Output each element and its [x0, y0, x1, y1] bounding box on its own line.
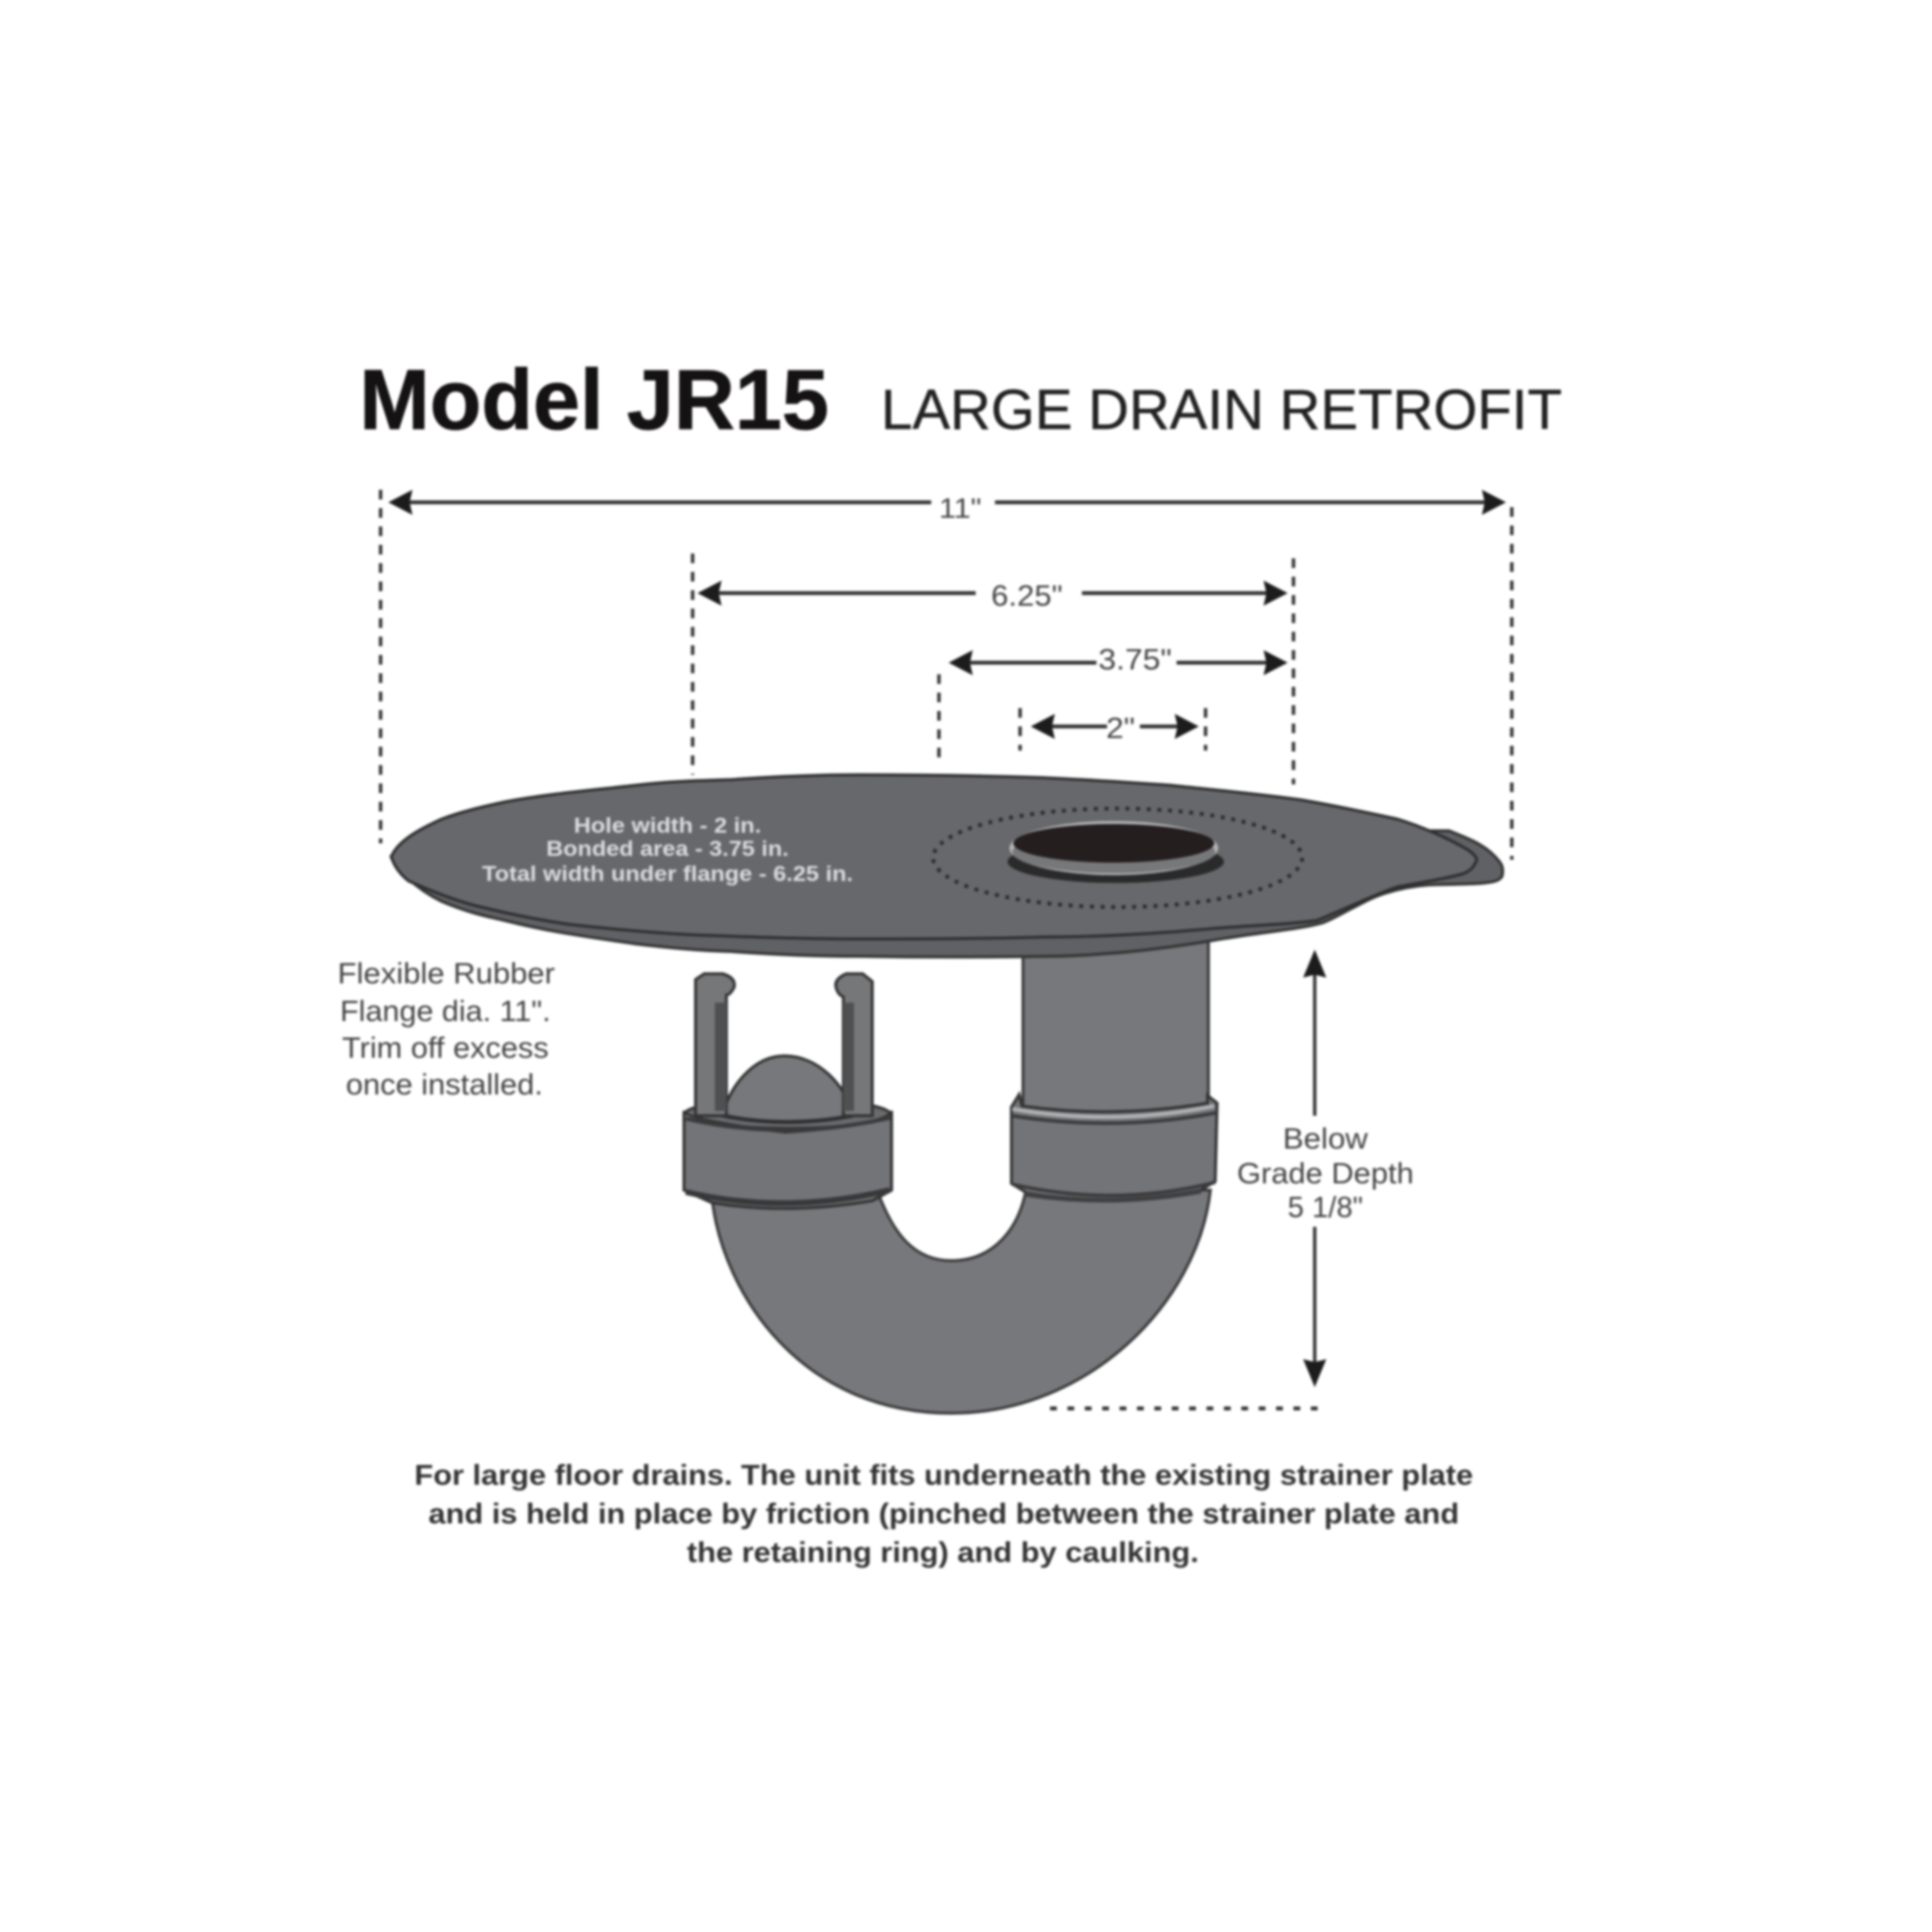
- flange text: Total width under flange - 6.25 in.: [482, 862, 853, 886]
- dotted ground line: [1050, 1406, 1321, 1410]
- description text: the retaining ring) and by caulking.: [687, 1537, 1199, 1569]
- rubber flange: [391, 775, 1503, 957]
- below grade depth label: 5 1/8": [1288, 1190, 1363, 1224]
- description text: [414, 1460, 1473, 1569]
- flexible rubber flange note: Flange dia. 11".: [340, 994, 551, 1028]
- description text: For large floor drains. The unit fits underneath the existing strainer plate: [414, 1460, 1473, 1492]
- flange top surface: [391, 775, 1477, 939]
- below grade depth label: Below: [1283, 1122, 1369, 1155]
- right vertical pipe: [1023, 932, 1208, 1121]
- flexible rubber flange note: Trim off excess: [342, 1031, 549, 1065]
- title: Model JR15: [359, 352, 829, 447]
- dimension arrow: 6.25 inch: 6.25": [991, 579, 1063, 612]
- title: [359, 352, 1562, 447]
- right prong: [836, 974, 872, 1116]
- U-bend: [712, 1190, 1210, 1413]
- dotted bonded area ring: [933, 809, 1302, 907]
- flexible rubber flange note: [338, 956, 554, 1101]
- dashed extension lines: [381, 490, 1512, 860]
- dimension arrow: 3.75 inch: 3.75": [1098, 642, 1172, 676]
- left prong: [696, 974, 734, 1116]
- drain hole: [1008, 821, 1224, 883]
- flexible rubber flange note: Flexible Rubber: [338, 956, 554, 990]
- flange text: Bonded area - 3.75 in.: [547, 837, 788, 861]
- flange underside lip: [391, 831, 1503, 957]
- P-trap drain: [684, 932, 1217, 1413]
- subtitle: LARGE DRAIN RETROFIT: [881, 379, 1562, 441]
- dimension arrow: 2 inch: [1031, 711, 1199, 745]
- left collar: [684, 1111, 892, 1208]
- right collar: [1011, 1094, 1217, 1200]
- flexible rubber flange note: once installed.: [346, 1067, 543, 1101]
- description text: and is held in place by friction (pinched between the strainer plate and: [429, 1498, 1459, 1530]
- flange text: [482, 813, 853, 886]
- dimension arrow: 3.75 inch: [949, 642, 1288, 676]
- left collar back rim: [685, 1099, 890, 1128]
- below grade depth arrow: [1303, 950, 1326, 1387]
- flange text: Hole width - 2 in.: [574, 813, 761, 838]
- below grade depth label: [1236, 1122, 1414, 1224]
- dimension arrow: 6.25 inch: [697, 579, 1288, 612]
- below grade depth label: Grade Depth: [1236, 1156, 1414, 1190]
- dimension arrow: 11 inch: 11": [939, 494, 981, 525]
- dimension arrow: 2 inch: 2": [1106, 711, 1135, 745]
- dimension arrow: 11 inch: [388, 490, 1506, 525]
- dome stopper: [723, 1056, 853, 1122]
